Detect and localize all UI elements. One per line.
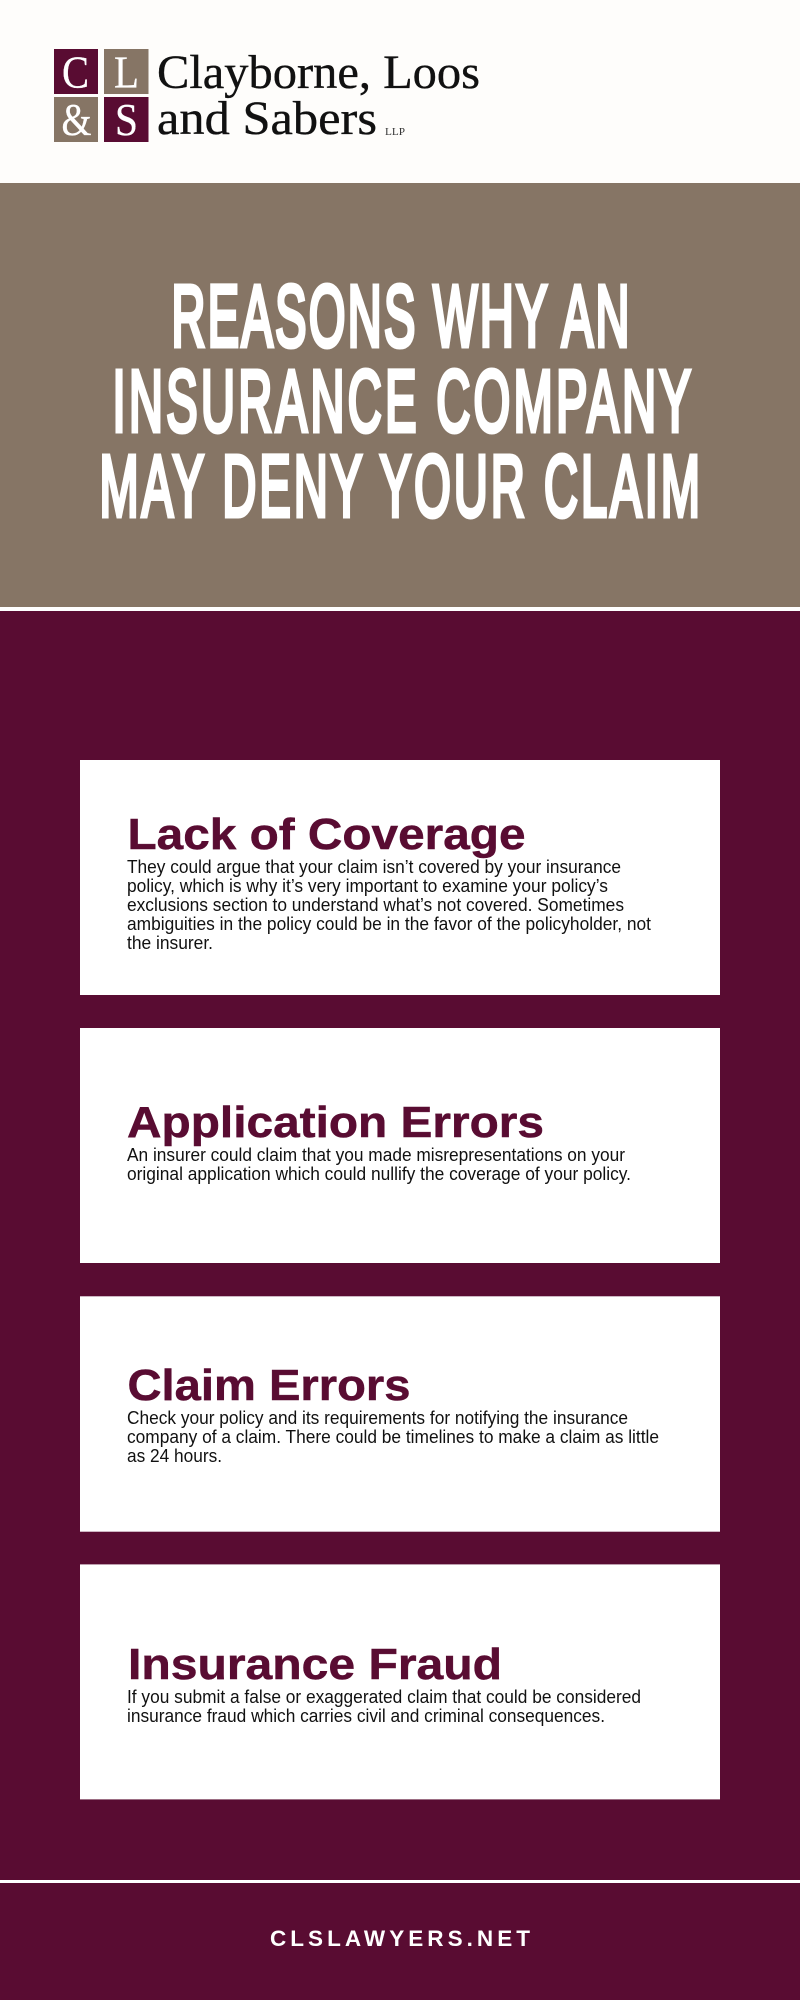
- text block: application errors: original application which could nullify the coverage of your policy.: [127, 1164, 631, 1184]
- footer website: CLSLAWYERS.NET: [270, 1926, 530, 1951]
- panel: logo header: [0, 0, 800, 183]
- icon: CLS monogram logo: S: [115, 95, 138, 145]
- text block: lack of coverage: policy, which is why it’s very important to examine your policy’s: [127, 876, 608, 896]
- text block: claim errors: Check your policy and its requirements for notifying the insurance: [127, 1408, 628, 1428]
- text block: insurance fraud: If you submit a false or exaggerated claim that could be considered: [127, 1687, 641, 1707]
- text block: lack of coverage: exclusions section to understand what’s not covered. Sometimes: [127, 895, 624, 915]
- text block: application errors: [127, 1145, 631, 1184]
- title: [100, 268, 700, 535]
- text block: lack of coverage: [127, 857, 651, 953]
- logo wordmark: and Sabers: [157, 92, 377, 145]
- heading: claim errors: Claim Errors: [128, 1361, 410, 1410]
- text block: insurance fraud: [127, 1687, 641, 1726]
- icon: CLS monogram logo: [54, 48, 148, 145]
- icon: CLS monogram logo: L: [114, 48, 139, 98]
- panel: application errors: [80, 1028, 720, 1263]
- text block: claim errors: company of a claim. There could be timelines to make a claim as little: [127, 1427, 659, 1447]
- panel: insurance fraud: [80, 1564, 720, 1799]
- icon: CLS monogram logo: C: [62, 48, 89, 98]
- panel: maroon content background: [0, 611, 800, 2000]
- heading: application errors: Application Errors: [127, 1098, 544, 1147]
- logo wordmark: Clayborne, Loos: [157, 46, 480, 99]
- text block: lack of coverage: They could argue that your claim isn’t covered by your insurance: [127, 857, 621, 877]
- title: MAY DENY YOUR CLAIM: [100, 438, 700, 535]
- logo wordmark: [157, 46, 480, 145]
- text block: claim errors: as 24 hours.: [127, 1446, 222, 1466]
- text block: lack of coverage: ambiguities in the policy could be in the favor of the policyholder, not: [127, 914, 651, 934]
- text block: application errors: An insurer could claim that you made misrepresentations on your: [127, 1145, 625, 1165]
- panel: claim errors: [80, 1296, 720, 1532]
- icon: CLS monogram logo: &: [62, 95, 92, 145]
- title: REASONS WHY AN: [172, 268, 629, 365]
- text block: insurance fraud: insurance fraud which carries civil and criminal consequences.: [127, 1706, 605, 1726]
- panel: title banner: [0, 183, 800, 607]
- heading: insurance fraud: Insurance Fraud: [128, 1640, 502, 1689]
- panel: lack of coverage: [80, 760, 720, 995]
- logo wordmark: LLP: [385, 126, 405, 138]
- heading: lack of coverage: Lack of Coverage: [128, 810, 526, 859]
- title: INSURANCE COMPANY: [112, 353, 691, 450]
- text block: claim errors: [127, 1408, 659, 1466]
- text block: lack of coverage: the insurer.: [127, 933, 213, 953]
